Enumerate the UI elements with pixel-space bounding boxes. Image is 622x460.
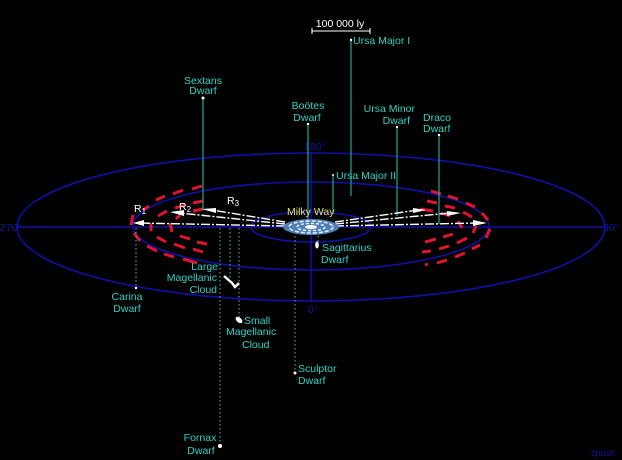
galaxy name labels bbox=[112, 35, 451, 457]
axis labels: 0° bbox=[308, 304, 318, 316]
red dashed orbit radii bbox=[131, 186, 490, 265]
galaxy name labels: Dwarf bbox=[293, 112, 321, 124]
R labels: R bbox=[227, 195, 235, 207]
galaxy name labels: Ursa Major II bbox=[336, 170, 396, 182]
axis labels: 180° bbox=[304, 141, 326, 153]
galaxy name labels: Fornax bbox=[184, 432, 217, 444]
galaxy name labels: Dwarf bbox=[321, 254, 349, 266]
galaxy name labels: Ursa Minor bbox=[364, 103, 416, 115]
Milky Way galaxy disc bbox=[283, 219, 339, 235]
R labels bbox=[134, 195, 240, 216]
axis labels: 90° bbox=[603, 222, 619, 234]
galaxy name labels: Magellanic bbox=[226, 326, 276, 338]
galaxy name labels: Large bbox=[191, 261, 218, 273]
radius arrowheads bbox=[133, 208, 487, 226]
galaxy name labels: Dwarf bbox=[189, 85, 217, 97]
axis labels bbox=[0, 141, 619, 316]
R labels: 1 bbox=[142, 207, 147, 216]
galaxy name labels: Dwarf bbox=[187, 445, 215, 457]
R labels: R bbox=[134, 203, 142, 215]
galaxy name labels: Dwarf bbox=[423, 123, 451, 135]
galaxy name labels: Dwarf bbox=[113, 303, 141, 315]
galaxy name labels: Dwarf bbox=[383, 115, 410, 127]
galaxy name labels: Dwarf bbox=[298, 375, 326, 387]
galaxy name labels: Ursa Major I bbox=[353, 35, 410, 47]
galaxy name labels: Carina bbox=[112, 291, 143, 303]
galaxy name labels: Sextans bbox=[184, 75, 222, 87]
galaxy name labels: Draco bbox=[423, 112, 451, 124]
white dash-dot radius lines bbox=[138, 210, 478, 226]
galaxy markers bbox=[135, 39, 440, 448]
galaxy name labels: Magellanic bbox=[167, 272, 217, 284]
vertical teal leader lines above plane bbox=[203, 40, 439, 228]
R labels: 3 bbox=[235, 199, 240, 208]
R labels: 2 bbox=[187, 205, 192, 214]
galaxy name labels: Small bbox=[244, 315, 270, 327]
axis labels: 270° bbox=[0, 222, 22, 234]
dotted leader lines below plane bbox=[136, 228, 318, 444]
R labels: R bbox=[179, 201, 187, 213]
scale bar bbox=[312, 18, 370, 34]
credit: zposh bbox=[591, 448, 615, 458]
coordinate grid: blue ellipses and axes bbox=[17, 153, 605, 301]
galaxy name labels: Sculptor bbox=[298, 363, 337, 375]
galaxy name labels: Cloud bbox=[242, 339, 270, 351]
galaxy name labels: Boötes bbox=[292, 100, 324, 112]
galaxy name labels: Cloud bbox=[190, 284, 217, 296]
galaxy name labels: Sagittarius bbox=[322, 242, 372, 254]
scale bar: 100 000 ly bbox=[316, 18, 365, 30]
Milky Way label: Milky Way bbox=[287, 206, 335, 218]
